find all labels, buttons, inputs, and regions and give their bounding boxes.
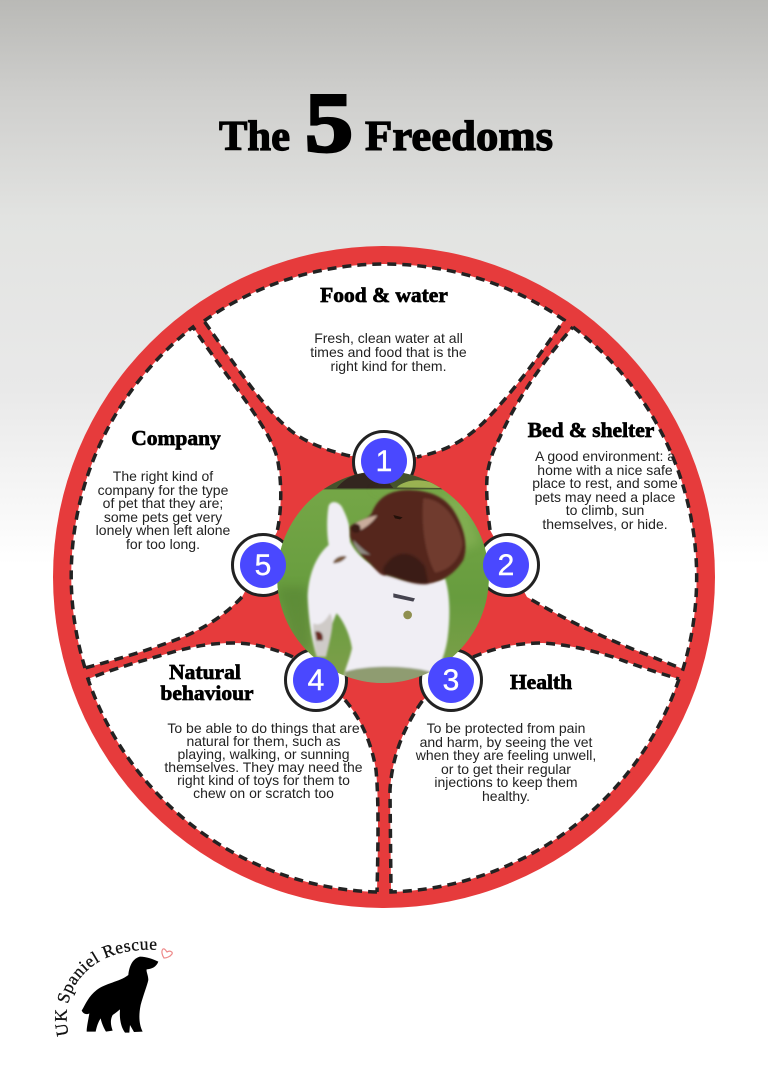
text: natural behaviour: natural for them, such as (186, 733, 341, 749)
badge rings (232, 432, 538, 710)
text: natural behaviour: chew on or scratch too (193, 785, 334, 801)
text: health: when they are feeling unwell, (415, 747, 596, 763)
title: 5 (305, 76, 353, 170)
text: health: To be protected from pain (427, 720, 585, 736)
badge 4: 4 (308, 664, 324, 697)
text: company: company for the type (98, 482, 229, 498)
badge 2 (483, 542, 529, 588)
text: food and water: times and food that is the (310, 344, 467, 360)
text: health: or to get their regular (441, 761, 571, 777)
panel: food and water (204, 264, 564, 457)
panel: health (390, 643, 679, 892)
heading: natural behaviour: behaviour (160, 681, 254, 705)
dog head (350, 490, 466, 584)
text: health: and harm, by seeing the vet (420, 734, 592, 750)
logo: UK Spaniel Rescue (54, 941, 173, 1037)
text: company: The right kind of (113, 468, 213, 484)
text: bed and shelter: themselves, or hide. (542, 516, 668, 532)
red wheel (53, 246, 715, 908)
text: natural behaviour: To be able to do things that are (167, 720, 360, 736)
text: bed and shelter: pets may need a place (535, 489, 676, 505)
dog body (308, 502, 449, 687)
photo: spaniel on grass (277, 470, 489, 687)
panel: natural behaviour (88, 643, 378, 892)
badge 2: 2 (498, 549, 514, 582)
icon: heart (162, 949, 172, 958)
text: company: of pet that they are; (103, 495, 223, 511)
text: bed and shelter: to climb, sun (566, 502, 644, 518)
heading: food and water: Food & water (320, 283, 448, 307)
text: health: injections to keep them (434, 774, 578, 790)
text: bed and shelter: home with a nice safe (537, 462, 673, 478)
text: company: lonely when left alone (96, 522, 231, 538)
text: company: some pets get very (104, 509, 222, 525)
grass shading (446, 497, 480, 548)
text: food and water: right kind for them. (331, 358, 446, 374)
icon: dog silhouette (82, 957, 158, 1033)
heading: bed and shelter: Bed & shelter (528, 418, 655, 442)
text: bed and shelter: A good environment: a (535, 448, 675, 464)
text: natural behaviour: playing, walking, or sunning (178, 746, 350, 762)
badge 5: 5 (255, 549, 271, 582)
panel: company (71, 327, 281, 668)
logo text: UK Spaniel Rescue (54, 941, 157, 1037)
text: natural behaviour: right kind of toys for them to (177, 772, 350, 788)
collar tag (393, 593, 415, 602)
title: The (219, 114, 290, 160)
heading: health: Health (510, 670, 572, 694)
badge 1: 1 (376, 445, 392, 478)
text: health: healthy. (482, 788, 530, 804)
title: Freedoms (365, 114, 553, 160)
text: company: for too long. (126, 536, 200, 552)
badge 3: 3 (443, 664, 459, 697)
heading: company: Company (131, 426, 221, 450)
panel: bed and shelter (487, 327, 697, 669)
badge 1 (361, 438, 407, 484)
text: food and water: Fresh, clean water at all (314, 330, 463, 346)
badge 3 (428, 657, 474, 703)
hedge (323, 472, 443, 490)
text: natural behaviour: themselves. They may need the (164, 759, 363, 775)
title (219, 76, 553, 170)
heading: natural behaviour: Natural (169, 660, 241, 684)
text: bed and shelter: place to rest, and some (532, 475, 678, 491)
badge 4 (293, 657, 339, 703)
badge 5 (240, 542, 286, 588)
